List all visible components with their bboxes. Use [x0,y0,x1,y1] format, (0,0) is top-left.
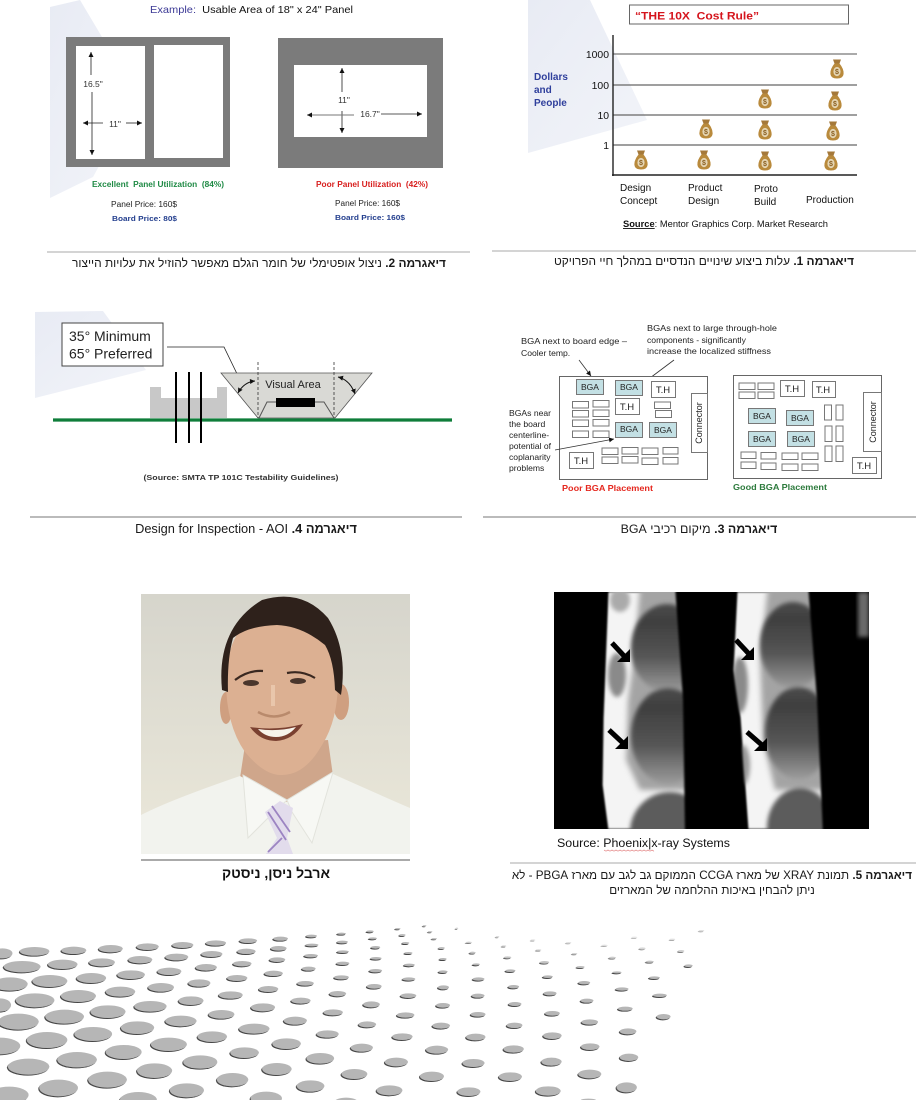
background circuit board graphic [35,311,146,398]
annotation: through-hole stiffness [646,323,777,381]
photo: x-ray image [554,592,869,829]
excellent panel prices: Panel Price: 160$ [111,200,178,209]
annotation: board centerline: problems [509,463,544,473]
poor panel prices: Panel Price: 160$ [335,199,401,208]
shirt [141,774,410,854]
x axis labels: Product [688,183,723,194]
excellent utilization label: Excellent Panel Utilization (84%) [92,180,224,189]
poor BGA board: T.H [620,402,634,413]
money bag icons: $ [763,130,767,137]
poor panel diagram: 16.7" [360,109,380,119]
caption: diagram 3: דיאגרמה 3. מיקום רכיבי BGA [621,522,777,536]
y axis values: 100 [592,81,609,92]
smile [250,724,303,741]
annotation: board centerline: coplanarity [509,452,551,462]
direction arrows [609,640,763,746]
photo: portrait [141,594,410,854]
source note: (Source: SMTA TP 101C Testability Guidelines) [144,475,338,482]
poor BGA board: BGA [620,424,638,434]
caption: diagram 5 [512,869,912,897]
y axis values: 1 [603,141,609,152]
poor panel prices: Board Price: 160$ [335,215,405,222]
face [226,612,338,775]
x axis labels: Design [620,183,651,194]
dark solder balls [606,592,824,829]
panel: design for inspection [35,311,452,482]
x axis labels: Concept [620,196,657,207]
gray strip on right edge [858,592,869,637]
hair [221,597,343,695]
caption: diagram 5: דיאגרמה 5. תמונת XRAY של מארז CCGA הממוקם גב לגב עם מארז PBGA - לא [512,869,912,882]
green board line [53,418,452,422]
annotation: board centerline: BGAs near [509,408,551,418]
poor panel prices [335,199,405,222]
angle callout box: 35° Minimum [69,328,151,344]
angle callout box [62,323,163,366]
annotation: board edge: Cooler temp. [521,348,570,358]
x axis labels: Production [806,195,854,206]
x axis labels: Design [688,196,719,207]
poor BGA board [560,376,708,480]
poor utilization label: Poor Panel Utilization (42%) [316,180,428,189]
centerline leader [555,439,614,450]
chart title box [630,5,848,24]
money bag icons: $ [763,99,767,106]
eyes [243,680,259,686]
y axis values: 10 [597,111,609,122]
good BGA board: BGA [791,413,809,423]
excellent panel diagram [66,37,230,167]
excellent panel prices [111,200,178,223]
poor BGA board: Connector [694,402,704,444]
good BGA board [734,376,882,478]
good BGA board: BGA [792,434,810,444]
y axis values: 1000 [586,50,609,61]
tie [265,801,293,854]
visual area trapezoid [221,362,372,418]
annotation: board edge [521,336,627,376]
ears [220,692,230,724]
money bag icons: $ [829,161,833,168]
annotation: board centerline [509,408,552,473]
chart title box: “THE 10X Cost Rule” [635,10,759,22]
visual area trapezoid: Visual Area [265,379,322,391]
poor BGA board: T.H [574,456,588,467]
good BGA board: T.H [785,384,799,395]
poor panel diagram: 11" [338,95,350,105]
annotation: board centerline: potential of [509,441,552,451]
annotation: through-hole stiffness: components - significantly [647,335,747,345]
caption: diagram 2: דיאגרמה 2. ניצול אופטימלי של חומר הגלם מאפשר להוזיל את עלויות הייצור [72,256,446,270]
x axis labels: Build [754,197,776,208]
money bag icons: $ [763,161,767,168]
y axis values [586,50,609,152]
good BGA board: Connector [868,401,878,443]
x axis labels [620,183,854,208]
good BGA board: BGA [753,434,771,444]
annotation: board centerline: centerline- [509,430,549,440]
poor BGA board: BGA [581,382,599,392]
light solder columns [602,592,825,829]
eyebrows [235,671,315,680]
good BGA board: T.H [816,385,830,396]
background circuit board graphic [528,0,647,153]
annotation: board centerline: the board [509,419,546,429]
annotation: through-hole stiffness: BGAs next to large through-hole [647,323,777,333]
poor BGA board: BGA [620,382,638,392]
excellent panel diagram: 16.5" [83,79,103,89]
money bag icons: $ [831,131,835,138]
decorative perspective dot field [0,925,704,1100]
money bag icons: $ [833,101,837,108]
nose [271,685,275,706]
arrow heads [615,647,767,751]
y axis label: People [534,98,567,109]
poor BGA board: BGA [654,425,672,435]
y axis label: and [534,85,552,96]
x axis labels: Proto [754,184,778,195]
poor placement label: Poor BGA Placement [562,483,653,493]
excellent panel diagram: 11" [109,119,121,129]
excellent panel prices: Board Price: 80$ [112,216,177,223]
caption: diagram 4: דיאגרמה 4. Design for Inspection - AOI [135,521,357,536]
gray shading behind solder balls [626,585,830,790]
panel: BGA placement [509,323,882,493]
money bag icons: $ [702,160,706,167]
good BGA board: BGA [753,411,771,421]
angle callout box: 65° Preferred [69,346,152,362]
y axis label [534,72,568,109]
panel: 10X cost rule chart [528,0,857,229]
money bag icons: $ [835,69,839,76]
gray through-hole connector [150,387,227,418]
x-ray source note: Source: Phoenix|x-ray Systems [557,836,730,850]
annotation: through-hole stiffness: increase the localized stiffness [647,346,771,356]
collar [243,772,333,843]
heading: usable area example: Example: Usable Area of 18" x 24" Panel [150,4,353,16]
caption: diagram 1: דיאגרמה 1. עלות ביצוע שינויים הנדסיים במהלך חיי הפרויקט [554,254,854,268]
poor BGA board: T.H [656,385,670,396]
chart axes and gridlines [612,35,857,176]
caption: diagram 5: ניתן להבחין באיכות ההלחמה של המארזים [609,884,815,897]
annotation: board edge: BGA next to board edge – [521,336,627,346]
money bag icons [634,60,844,170]
black gaps between solder columns [600,592,836,829]
money bag icons: $ [704,129,708,136]
good BGA board: T.H [857,461,871,472]
poor panel diagram [278,38,443,168]
panel: panel utilization example [50,0,443,223]
good placement label: Good BGA Placement [733,482,827,492]
y axis label: Dollars [534,72,568,83]
callout leader [167,347,240,380]
background circuit board graphic [50,0,130,198]
connector pins [176,372,201,443]
neck [240,740,333,802]
caption: portrait name: ארבל ניסן, ניסטק [222,865,330,881]
chart source: Source: Mentor Graphics Corp. Market Research [623,219,828,229]
money bag icons: $ [639,160,643,167]
